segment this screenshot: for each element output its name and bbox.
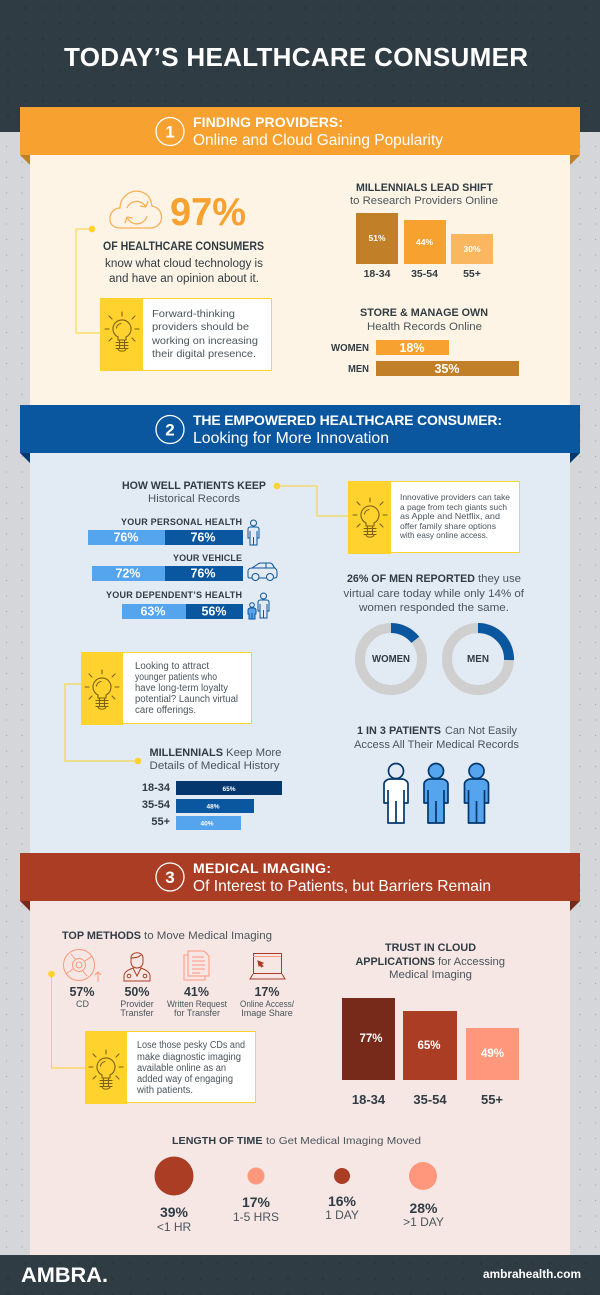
virtual care text: 26% OF MEN REPORTED — [347, 573, 475, 585]
heading: length of time: to Get Medical Imaging Moved — [266, 1135, 421, 1147]
access records text: Access All Their Medical Records — [354, 739, 519, 751]
section 2 banner: 2 — [165, 420, 175, 440]
chart heading: store and manage: Health Records Online — [367, 321, 482, 333]
section 1 banner — [20, 107, 580, 165]
bar: vehicle: 76% — [190, 566, 216, 580]
website: ambrahealth.com — [483, 1269, 581, 1281]
bar chart: health records by gender — [331, 340, 519, 376]
bar chart: health records by gender: WOMEN — [331, 343, 369, 354]
method: online access: 17% — [254, 985, 280, 999]
callout: pesky CDs: available online as an — [137, 1063, 226, 1074]
callout: younger patients: Looking to attract — [135, 661, 209, 672]
method: online access: Image Share — [241, 1008, 293, 1018]
bar chart: research providers online: 35-54 — [411, 268, 438, 280]
bar chart: research providers online: 44% — [416, 237, 433, 247]
icon: written request — [184, 951, 209, 980]
chart heading: millennials lead shift — [350, 182, 498, 207]
callout: digital presence — [100, 298, 272, 371]
bar chart: health records by gender: 35% — [434, 362, 460, 376]
panel: medical imaging — [20, 853, 580, 1255]
section 3 banner: MEDICAL IMAGING: — [193, 860, 331, 876]
callout: digital presence: working on increasing — [151, 335, 258, 347]
bar chart: health records by gender: 18% — [399, 341, 425, 355]
access records text — [354, 725, 519, 751]
bar chart: research providers online — [356, 213, 493, 280]
panel: empowered consumer — [20, 405, 580, 854]
chart heading: millennials lead shift: to Research Providers Online — [350, 195, 498, 207]
icon: cloud — [110, 191, 162, 228]
callout: pesky CDs — [85, 1031, 256, 1104]
callout: digital presence: Forward-thinking — [152, 308, 235, 320]
bar: vehicle — [92, 553, 243, 581]
callout: tech giants: Innovative providers can take — [400, 492, 510, 502]
method: provider transfer — [120, 985, 154, 1018]
callout: digital presence: providers should be — [152, 321, 249, 333]
method: CD — [69, 985, 95, 1009]
virtual care text: women responded the same. — [358, 602, 509, 614]
connector to callout — [76, 226, 100, 333]
callout: younger patients: care offerings. — [135, 705, 196, 716]
stat: 1 day: 1 DAY — [325, 1208, 359, 1222]
section 2 banner: THE EMPOWERED HEALTHCARE CONSUMER: — [193, 412, 502, 428]
access records text: Can Not Easily — [445, 725, 517, 737]
heading: top methods: TOP METHODS — [62, 930, 141, 942]
panel: finding providers — [20, 107, 580, 405]
cloud awareness text: and have an opinion about it. — [109, 273, 259, 285]
bar: dependent's health: 63% — [140, 604, 166, 618]
bar: personal health: YOUR PERSONAL HEALTH — [121, 517, 242, 527]
method: provider transfer: Transfer — [120, 1008, 154, 1018]
callout: younger patients: have long-term loyalty — [135, 683, 228, 694]
section 3 banner — [20, 853, 580, 911]
virtual care text: virtual care today while only 14% of — [344, 588, 525, 600]
title: TODAY’S HEALTHCARE CONSUMER — [64, 42, 528, 72]
section 1 banner: FINDING PROVIDERS: — [193, 114, 343, 130]
logo: AMBRA. — [21, 1264, 108, 1287]
callout: pesky CDs: make diagnostic imaging — [137, 1052, 241, 1063]
stat: 1 day: 16% — [328, 1193, 357, 1209]
donut chart: men: MEN — [467, 654, 489, 665]
method: CD: 57% — [69, 985, 95, 999]
bar: personal health — [88, 517, 243, 545]
heading: trust in cloud — [356, 942, 505, 981]
stat: under 1 hour: <1 HR — [157, 1220, 192, 1234]
bar chart: medical history by age: 48% — [206, 804, 220, 810]
heading: millennials keep more: MILLENNIALS — [150, 747, 223, 759]
connector to innovation callout — [274, 483, 348, 516]
bar: dependent's health — [106, 590, 243, 619]
icon: CD — [64, 950, 101, 982]
heading: how well patients keep — [122, 480, 266, 505]
connector to millennials chart — [65, 684, 141, 764]
section 1 banner: Online and Cloud Gaining Popularity — [193, 132, 443, 149]
connector to CD callout — [49, 971, 85, 1068]
donut chart: women — [360, 628, 422, 690]
callout: tech giants: a page from tech giants such — [400, 502, 507, 512]
chart heading: millennials lead shift: MILLENNIALS LEAD SHIFT — [356, 182, 493, 194]
method: written request: 41% — [184, 985, 209, 999]
chart heading: store and manage — [360, 307, 488, 333]
callout: tech giants — [348, 481, 520, 554]
heading: millennials keep more: Details of Medical History — [150, 760, 280, 772]
bar chart: research providers online: 55+ — [463, 268, 481, 280]
method: written request: for Transfer — [174, 1008, 220, 1018]
callout: younger patients: younger patients who — [135, 672, 217, 683]
bar chart: research providers online: 51% — [368, 233, 386, 243]
method: provider transfer: Provider — [120, 999, 154, 1009]
method: provider transfer: 50% — [124, 985, 150, 999]
callout: tech giants: offer family share options — [400, 521, 496, 531]
donut chart: women: WOMEN — [372, 654, 410, 665]
bar chart: trust in cloud by age: 77% — [359, 1033, 383, 1045]
heading: how well patients keep: Historical Records — [148, 493, 241, 505]
heading: length of time: LENGTH OF TIME — [172, 1135, 262, 1147]
bar chart: trust in cloud by age: 55+ — [481, 1092, 503, 1107]
section 2 banner — [20, 405, 580, 463]
chart heading: store and manage: STORE & MANAGE OWN — [360, 307, 488, 319]
icon: parent and child — [248, 593, 269, 619]
section 2 banner: Looking for More Innovation — [193, 430, 389, 447]
icon: three patients — [384, 764, 488, 823]
method: online access — [240, 985, 294, 1018]
bar chart: medical history by age: 40% — [200, 820, 214, 828]
heading: trust in cloud: Medical Imaging — [389, 969, 472, 981]
stat: under 1 hour: 39% — [160, 1204, 189, 1220]
bar chart: medical history by age: 55+ — [151, 816, 170, 828]
cloud awareness text — [103, 241, 264, 285]
stat: 1-5 hours: 1-5 HRS — [233, 1210, 279, 1224]
bar: vehicle: YOUR VEHICLE — [173, 553, 242, 563]
heading: millennials keep more — [150, 747, 282, 772]
callout: younger patients — [81, 652, 252, 725]
bar chart: health records by gender: MEN — [348, 364, 369, 375]
bar chart: medical history by age — [142, 781, 282, 830]
heading: top methods — [62, 930, 272, 942]
virtual care text — [344, 573, 525, 614]
section 1 banner: 1 — [165, 122, 175, 142]
bar: dependent's health: YOUR DEPENDENT’S HEALTH — [106, 590, 242, 600]
virtual care text: they use — [478, 573, 521, 585]
top header band — [0, 0, 600, 132]
stat: 1 day — [325, 1168, 359, 1222]
bar chart: research providers online: 30% — [463, 244, 481, 254]
bar chart: trust in cloud by age: 18-34 — [352, 1092, 386, 1107]
bar: vehicle: 72% — [115, 566, 141, 580]
bar chart: medical history by age: 18-34 — [142, 782, 171, 794]
callout: pesky CDs: Lose those pesky CDs and — [137, 1040, 245, 1051]
bar chart: trust in cloud by age: 35-54 — [413, 1092, 447, 1107]
method: CD: CD — [76, 999, 89, 1009]
bar: dependent's health: 56% — [201, 604, 227, 618]
section 3 banner: Of Interest to Patients, but Barriers Remain — [193, 878, 491, 895]
access records text: 1 IN 3 PATIENTS — [357, 725, 441, 737]
cloud awareness text: OF HEALTHCARE CONSUMERS — [103, 241, 264, 253]
heading: top methods: to Move Medical Imaging — [144, 930, 272, 942]
callout: pesky CDs: with patients. — [136, 1085, 193, 1096]
stat: over 1 day: 28% — [409, 1200, 438, 1216]
method: written request: Written Request — [167, 999, 227, 1009]
callout: digital presence: their digital presence. — [152, 348, 256, 360]
bar chart: trust in cloud by age: 65% — [417, 1040, 441, 1052]
heading: length of time — [172, 1135, 421, 1147]
heading: trust in cloud: for Accessing — [438, 956, 505, 968]
bar chart: trust in cloud by age — [342, 998, 519, 1107]
icon: person — [248, 520, 259, 545]
icon: laptop — [250, 954, 285, 979]
bar: personal health: 76% — [113, 530, 139, 544]
donut chart: men — [447, 628, 509, 690]
method: online access: Online Access/ — [240, 999, 294, 1009]
stat: over 1 day: >1 DAY — [403, 1215, 444, 1229]
heading: millennials keep more: Keep More — [226, 747, 282, 759]
callout: younger patients: potential? Launch virtual — [135, 694, 238, 705]
97% statistic: 97% — [170, 191, 246, 234]
bar chart: medical history by age: 65% — [222, 786, 236, 793]
stat: under 1 hour — [154, 1156, 194, 1234]
heading: how well patients keep: HOW WELL PATIENTS KEEP — [122, 480, 266, 492]
cloud awareness text: know what cloud technology is — [105, 258, 263, 270]
footer band — [0, 1255, 600, 1295]
heading: trust in cloud: APPLICATIONS — [356, 956, 435, 968]
callout: tech giants: with easy online access. — [399, 530, 488, 540]
heading: trust in cloud: TRUST IN CLOUD — [385, 942, 476, 954]
bar chart: research providers online: 18-34 — [364, 268, 391, 280]
icon: car — [248, 563, 277, 580]
method: written request — [167, 985, 227, 1018]
bar: personal health: 76% — [190, 530, 216, 544]
stat: 1-5 hours: 17% — [242, 1194, 271, 1210]
stat: 1-5 hours — [233, 1168, 279, 1224]
bar chart: trust in cloud by age: 49% — [481, 1048, 504, 1060]
bar chart: medical history by age: 35-54 — [142, 799, 171, 811]
stat: over 1 day — [403, 1162, 444, 1229]
icon: provider — [124, 953, 150, 981]
callout: pesky CDs: added way of engaging — [137, 1074, 233, 1085]
callout: tech giants: as Apple and Netflix, and — [400, 511, 500, 521]
section 3 banner: 3 — [165, 868, 175, 887]
